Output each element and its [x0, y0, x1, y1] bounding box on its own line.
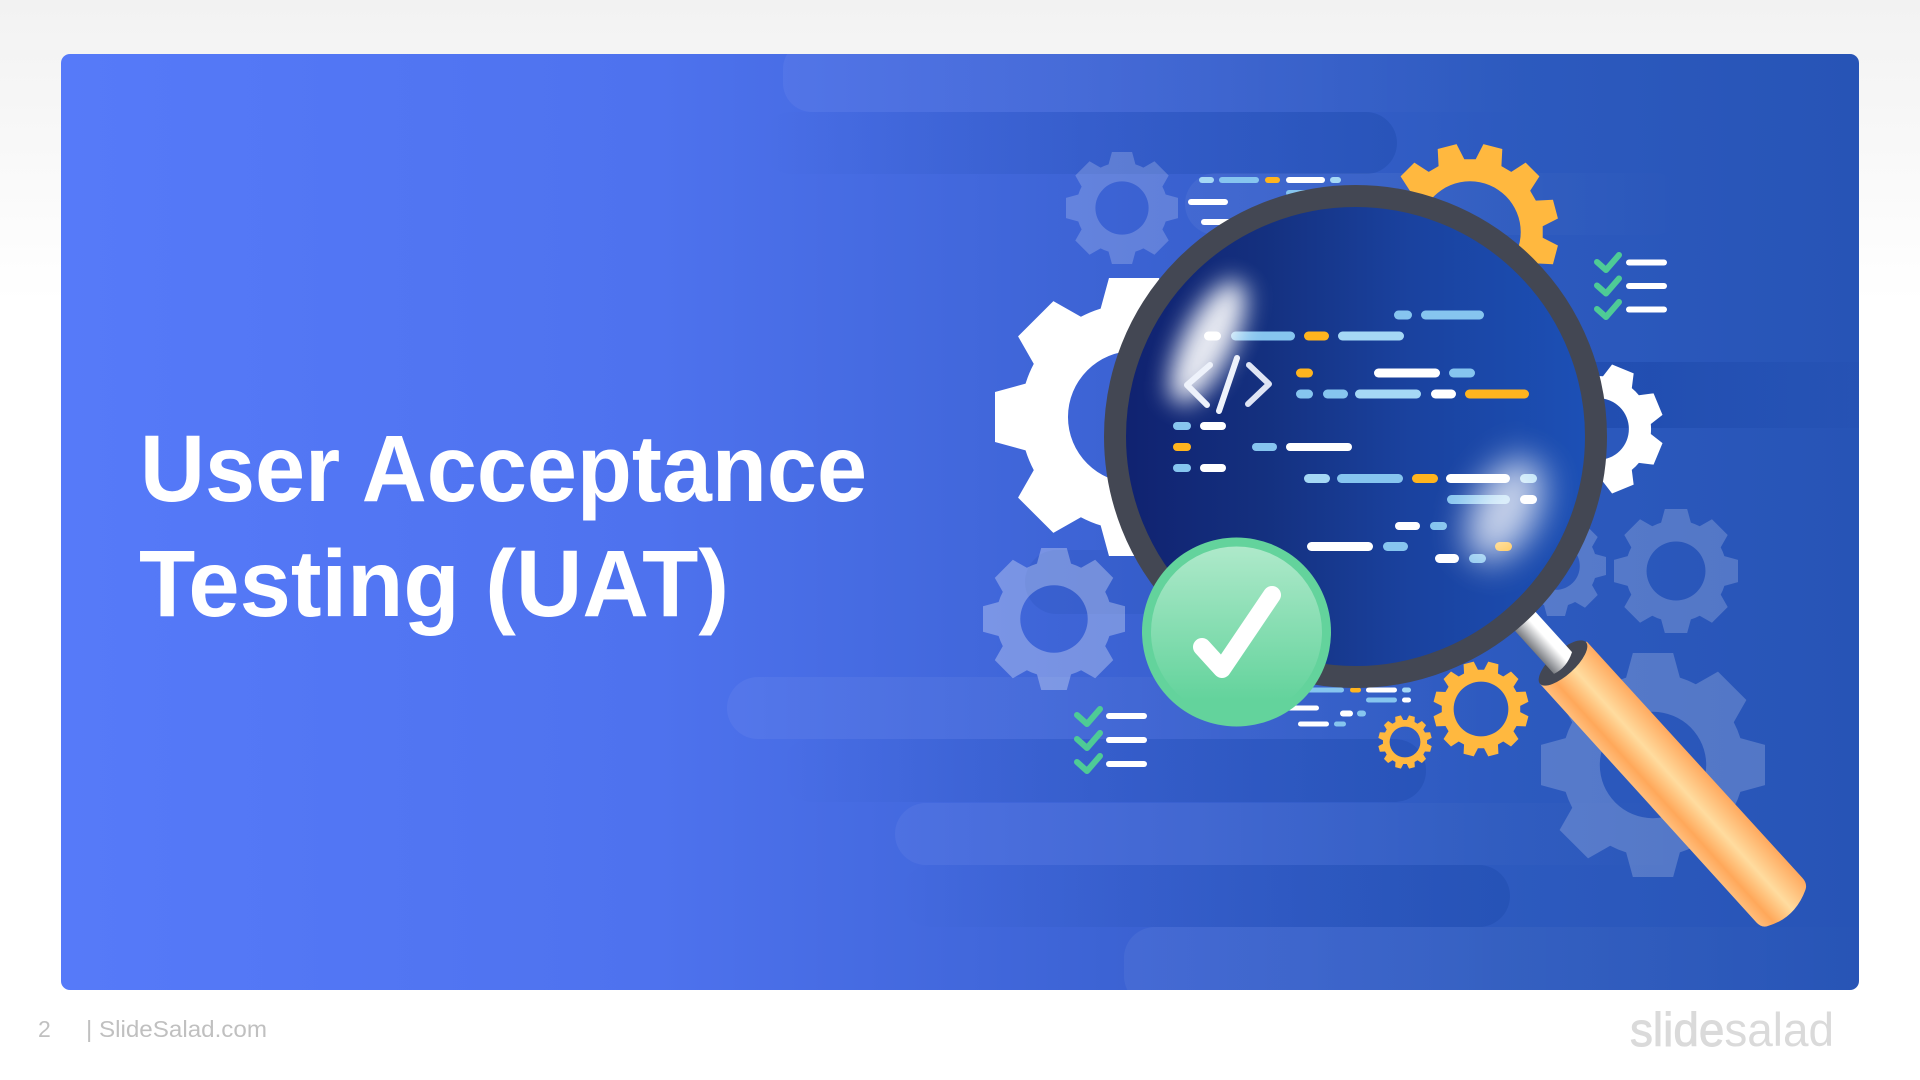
code lines above the lens: [1188, 177, 1341, 225]
code lines inside lens: [1173, 310, 1537, 563]
page number: 2: [38, 1016, 51, 1042]
icon: large white gear: [995, 278, 1273, 556]
icon: faded gear bottom right: [1541, 653, 1765, 877]
handle steel ferrule: [1492, 587, 1576, 675]
handle body: [1540, 641, 1815, 934]
lens glass: [1124, 204, 1588, 668]
icon: orange gear medium: [1434, 662, 1528, 756]
logo: slidesalad: slidesalad: [1630, 1003, 1834, 1056]
checklist: right: [1597, 255, 1667, 317]
icon: faded gear left: [983, 548, 1125, 690]
code lines below the lens: [1280, 688, 1411, 726]
icon: code brackets: [1187, 358, 1269, 411]
footer site name: | SlideSalad.com: [86, 1016, 267, 1042]
magnifier handle: [1480, 574, 1815, 934]
magnifier ring: [1115, 196, 1596, 677]
background pill bands: [727, 40, 1884, 1007]
handle collar: [1532, 633, 1594, 693]
icon: small white gear: [1513, 344, 1683, 514]
magnifier lens and ring: [1115, 196, 1596, 677]
icon: green check badge: [1142, 538, 1331, 726]
lens highlights: [1155, 270, 1560, 574]
title: Testing (UAT): [139, 531, 729, 637]
icon: orange gear small: [1378, 715, 1432, 769]
icon: faded gear behind lens: [1506, 516, 1606, 616]
checklist: left: [1077, 709, 1147, 771]
icon: faded gear top: [1066, 152, 1178, 264]
icon: orange gear top: [1382, 144, 1558, 320]
title: User Acceptance: [140, 416, 867, 522]
title: [139, 416, 867, 637]
icon: faded gear right: [1614, 509, 1738, 633]
